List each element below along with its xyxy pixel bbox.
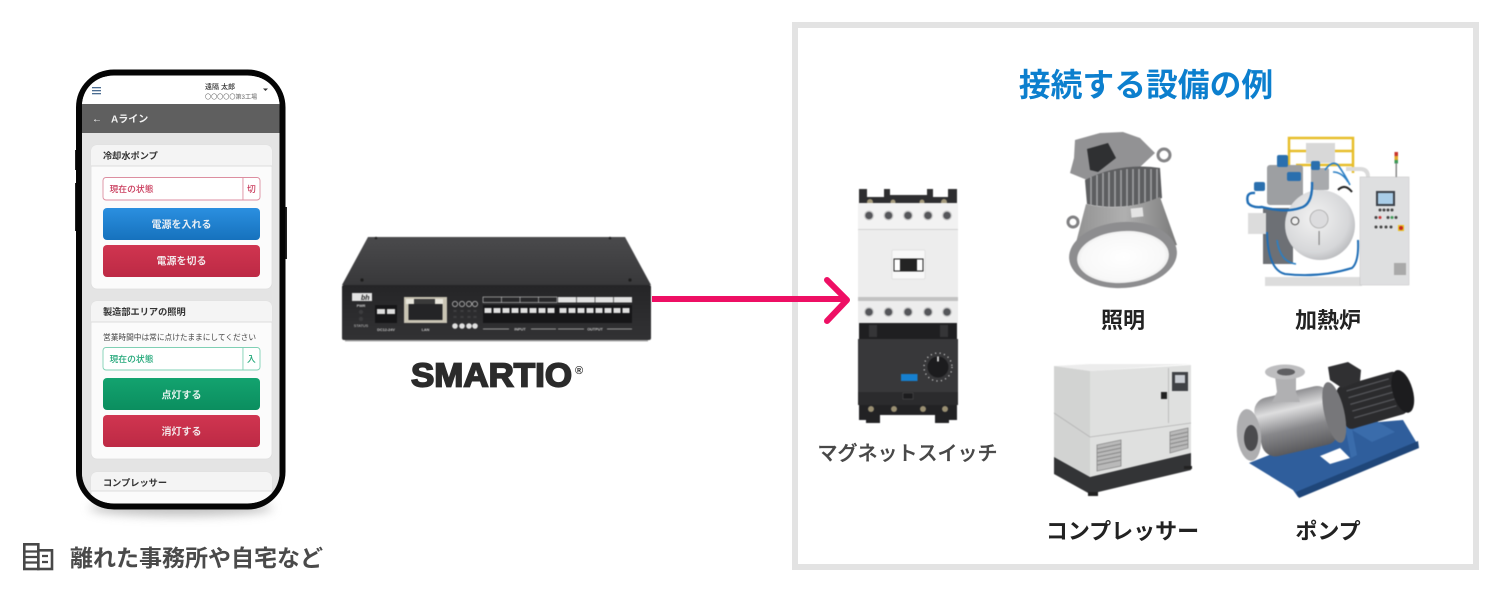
input and output terminals: INPUT (514, 328, 526, 332)
card: cooling water pump: 切 (247, 184, 256, 194)
phone status header (82, 76, 280, 104)
card: factory area lighting: 営業時間中は常に点けたままにしてください (103, 332, 256, 342)
SMARTIO device (342, 237, 651, 342)
phone app mockup (75, 72, 287, 532)
magnetic switch (818, 189, 998, 465)
icon: office building (24, 544, 52, 569)
icon: furnace illustration (1247, 138, 1409, 286)
phone status header: 遠隔 太郎 (205, 82, 235, 91)
card: cooling water pump: 現在の状態 (110, 183, 154, 194)
card: cooling water pump (91, 145, 272, 289)
LAN port: LAN (422, 328, 430, 332)
device brand plate and indicators: PWR (357, 304, 366, 308)
card: compressor (90, 472, 272, 503)
card: cooling water pump: 冷却水ポンプ (103, 150, 158, 161)
icon: industrial lamp (1067, 132, 1179, 292)
equipment: lighting (1067, 132, 1179, 333)
icon: contactor illustration (858, 189, 958, 423)
LAN port (404, 297, 447, 332)
magnetic switch: マグネットスイッチ (818, 442, 998, 465)
panel heading: 接続する設備の例 (1019, 67, 1273, 103)
card: factory area lighting: 製造部エリアの照明 (103, 306, 186, 317)
card: compressor: コンプレッサー (103, 478, 167, 488)
input and output terminals: OUTPUT (587, 328, 603, 332)
card: factory area lighting: 現在の状態 (110, 353, 154, 364)
power connector: DC12-24V (377, 328, 395, 332)
icon: compressor unit (1054, 364, 1192, 496)
device brand plate and indicators: bh (361, 295, 370, 302)
device brand plate and indicators: STATUS (354, 324, 369, 328)
equipment: heating furnace (1247, 138, 1409, 333)
card: factory area lighting: 入 (247, 354, 256, 364)
phone status header: 〇〇〇〇〇第3工場 (205, 93, 257, 101)
card: cooling water pump: 電源を入れる (152, 218, 212, 231)
SMARTIO logo: SMARTIO (411, 358, 572, 394)
phone title bar (82, 104, 280, 133)
power connector (375, 305, 397, 332)
equipment: pump (1234, 362, 1419, 544)
caption: remote office or home: 離れた事務所や自宅など (70, 545, 323, 571)
equipment: compressor: コンプレッサー (1046, 519, 1199, 544)
equipment: heating furnace: 加熱炉 (1295, 308, 1361, 333)
card: factory area lighting (91, 301, 272, 459)
phone title bar: ← (92, 114, 102, 125)
SMARTIO logo: ® (575, 365, 583, 377)
LED indicators (452, 301, 478, 329)
equipment: compressor (1046, 364, 1199, 544)
phone title bar: Aライン (111, 114, 148, 126)
card: factory area lighting: 消灯する (162, 425, 202, 438)
input and output terminals (483, 297, 632, 332)
equipment: pump: ポンプ (1295, 519, 1361, 544)
icon: centrifugal pump (1234, 362, 1419, 498)
card: factory area lighting: 点灯する (162, 388, 202, 402)
card: cooling water pump: 電源を切る (156, 254, 206, 268)
arrow: device to magnetic switch (652, 280, 847, 321)
device brand plate and indicators (352, 293, 372, 328)
equipment: lighting: 照明 (1101, 308, 1145, 333)
